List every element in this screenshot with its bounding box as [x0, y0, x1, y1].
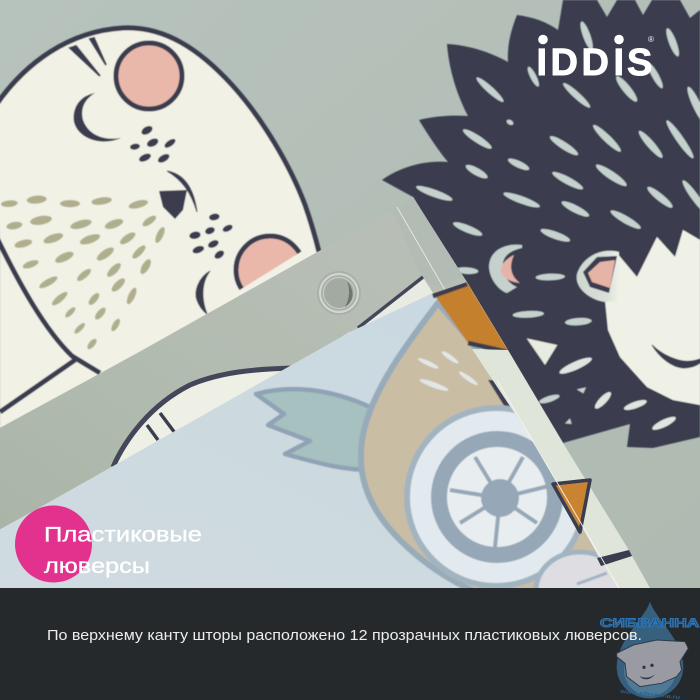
owl beak patch — [533, 549, 617, 588]
hem dark band — [597, 550, 632, 566]
owl eye spokes — [450, 457, 553, 547]
seal eye — [74, 93, 121, 142]
flap side strip — [392, 197, 463, 288]
watermark bathtub — [617, 640, 688, 687]
pink accent circle — [15, 506, 92, 582]
owl feather marks — [417, 350, 479, 393]
front curtain panel with owl print — [0, 282, 617, 588]
watermark inner shading — [624, 644, 676, 696]
owl wing — [256, 389, 372, 470]
hedgehog eye pink — [501, 255, 520, 283]
heading: люверсы — [44, 554, 150, 578]
owl eye ring — [439, 439, 555, 555]
flap seal print — [113, 368, 293, 467]
curtain flap — [0, 197, 497, 530]
seal olive chest marks — [1, 195, 167, 351]
owl beak line — [577, 573, 607, 584]
heading: Пластиковые — [44, 522, 202, 546]
dark footer bar — [0, 588, 700, 700]
hem stitch — [497, 380, 619, 588]
owl dark cheek band — [488, 380, 510, 407]
owl eye hub — [481, 479, 519, 517]
owl head band — [433, 282, 508, 350]
hedgehog ear — [577, 251, 619, 302]
seal dark whisker dots — [130, 124, 234, 260]
flap lower white band — [358, 277, 433, 330]
seal mouth crescent — [196, 271, 210, 314]
hem seam stitches — [0, 207, 497, 530]
illustration: seal — [0, 28, 319, 428]
hem orange triangle — [553, 480, 590, 532]
grommet eyelet — [317, 271, 361, 315]
hedgehog mouth — [652, 345, 700, 368]
hem strip — [472, 349, 650, 588]
seal whisker ticks — [70, 38, 106, 76]
watermark name: СИБВАННА — [600, 617, 700, 630]
hedgehog lower quill marks — [527, 338, 677, 432]
watermark: sibvanna — [600, 602, 700, 700]
brand logo: iddis: IDDIS — [536, 42, 652, 84]
seal ear top — [116, 43, 182, 109]
hedgehog eye crescent — [489, 245, 522, 293]
watermark bathtub face — [639, 664, 655, 679]
hedgehog face — [600, 230, 700, 405]
seal nose arc — [167, 171, 197, 212]
watermark drop — [617, 602, 683, 698]
flap seal ticks — [147, 413, 175, 440]
seal nose — [159, 190, 187, 219]
owl head band outlines — [433, 284, 508, 352]
brand logo: iddis: ® — [648, 35, 654, 44]
hedgehog quill marks — [415, 20, 700, 326]
watermark url: www.sibvanna.ru — [619, 689, 681, 700]
hedgehog body with spikes — [382, 0, 700, 448]
description text: По верхнему канту шторы расположено 12 прозрачных пластиковых люверсов. — [47, 628, 642, 644]
owl eye — [407, 408, 585, 586]
seal ear lower — [232, 232, 302, 290]
owl body — [361, 303, 620, 592]
illustration: hedgehog — [382, 0, 700, 448]
